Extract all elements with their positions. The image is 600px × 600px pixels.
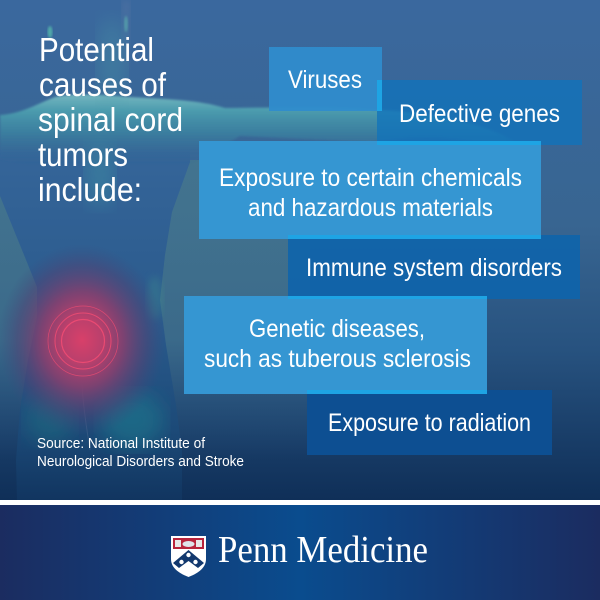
illustration: human body <box>0 0 515 500</box>
cause box: viruses <box>269 47 382 111</box>
cause box: genetic diseases: Genetic diseases, <box>249 315 425 343</box>
source note: Source: National Institute of <box>37 435 206 452</box>
cause box: immune system disorders: Immune system disorders <box>306 254 562 282</box>
title <box>38 32 183 209</box>
cause box: exposure to chemicals <box>199 141 541 239</box>
source note <box>37 435 244 470</box>
cause box: exposure to radiation: Exposure to radiation <box>328 409 531 437</box>
cause box: defective genes: Defective genes <box>399 100 560 128</box>
icon: Penn shield <box>171 536 206 577</box>
logo wordmark: Penn Medicine <box>218 529 428 571</box>
illustration: tumor glow with target rings <box>0 244 166 436</box>
title: include: <box>38 172 142 209</box>
cause box: genetic diseases: such as tuberous sclerosis <box>204 345 471 373</box>
title: Potential <box>39 32 154 69</box>
source note: Neurological Disorders and Stroke <box>37 453 244 470</box>
cause box: genetic diseases <box>184 296 487 394</box>
cause box: exposure to radiation <box>307 390 552 455</box>
cause box: defective genes <box>377 80 582 145</box>
cause box: exposure to chemicals: and hazardous materials <box>248 194 493 222</box>
title: spinal cord <box>38 102 183 139</box>
cause box: immune system disorders <box>288 235 580 299</box>
title: tumors <box>38 137 128 174</box>
cause box: viruses: Viruses <box>288 66 362 94</box>
cause box: exposure to chemicals: Exposure to certain chemicals <box>219 164 522 192</box>
white divider band <box>0 500 600 505</box>
title: causes of <box>39 67 167 104</box>
footer band <box>0 505 600 600</box>
